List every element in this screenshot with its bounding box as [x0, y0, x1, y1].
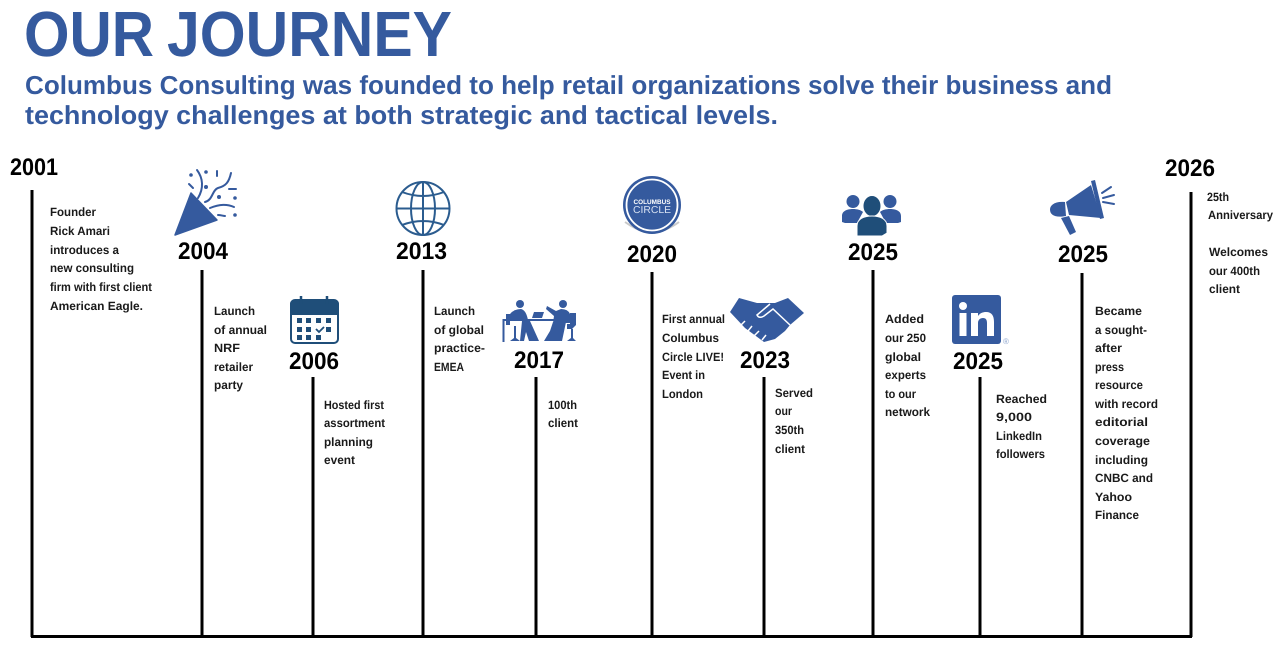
milestone 2025: press: Finance	[1095, 508, 1139, 522]
milestone 2025: experts: network	[885, 405, 930, 419]
milestone 2020: London	[662, 387, 703, 401]
milestone 2004: 2004	[178, 238, 229, 265]
milestone 2001: new consulting	[50, 261, 134, 275]
milestone 2013	[396, 238, 485, 374]
milestone 2026: 25th	[1207, 190, 1229, 204]
milestone 2013: of global	[434, 323, 484, 337]
milestone 2023: 2023	[740, 347, 790, 374]
milestone 2025: press: editorial	[1095, 415, 1148, 429]
milestone 2025: press: CNBC and	[1095, 471, 1153, 485]
milestone 2026: 2026	[1165, 155, 1215, 182]
milestone 2025: experts: global	[885, 350, 921, 364]
milestone 2025: press: press	[1095, 360, 1124, 374]
milestone 2025: press: a sought-	[1095, 323, 1147, 337]
subtitle: technology challenges at both strategic and tactical levels.	[25, 100, 778, 130]
milestone 2013: practice-	[434, 341, 485, 355]
milestone 2006: 2006	[289, 348, 339, 375]
milestone 2006: assortment	[324, 416, 385, 430]
milestone 2025: LinkedIn followers: Reached	[996, 392, 1047, 406]
icon: globe	[396, 182, 450, 235]
milestone 2017: 2017	[514, 347, 564, 374]
milestone 2025: experts: experts	[885, 368, 926, 382]
icon: handshake	[730, 298, 804, 342]
icon: meeting at desk	[502, 300, 576, 342]
milestone 2026: client	[1209, 282, 1240, 296]
milestone 2023: 350th	[775, 423, 804, 437]
milestone 2025: press	[1058, 241, 1158, 522]
milestone 2001: introduces a	[50, 243, 119, 257]
milestone 2023: Served	[775, 386, 813, 400]
milestone 2026	[1165, 155, 1273, 296]
title: OUR	[24, 0, 154, 70]
milestone 2025: press: coverage	[1095, 434, 1150, 448]
milestone 2004	[178, 238, 267, 392]
milestone 2020: First annual	[662, 312, 725, 326]
milestone 2020	[627, 241, 725, 401]
milestone 2026: Anniversary	[1208, 208, 1273, 222]
milestone 2025: press: including	[1095, 453, 1148, 467]
milestone 2025: experts: to our	[885, 387, 916, 401]
milestone 2001: firm with first client	[50, 280, 152, 294]
icon: megaphone	[1050, 180, 1114, 235]
milestone 2020: Columbus	[662, 331, 719, 345]
milestone 2004: retailer	[214, 360, 253, 374]
milestone 2017: client	[548, 416, 578, 430]
milestone 2025: experts	[848, 239, 930, 419]
icon: LinkedIn	[952, 295, 1009, 346]
milestone 2004: Launch	[214, 304, 255, 318]
milestone 2025: press: resource	[1095, 378, 1143, 392]
icon: Columbus Circle logo	[623, 176, 681, 234]
milestone 2006	[289, 348, 385, 467]
milestone 2025: LinkedIn followers: LinkedIn	[996, 429, 1042, 443]
milestone 2025: experts: our 250	[885, 331, 926, 345]
milestone 2025: LinkedIn followers: 9,000	[996, 410, 1032, 424]
icon: Columbus Circle logo: CIRCLE	[633, 205, 671, 216]
milestone 2013: 2013	[396, 238, 447, 265]
milestone 2017	[514, 347, 578, 430]
icon: Columbus Circle logo: COLUMBUS	[634, 199, 671, 206]
title: JOURNEY	[167, 0, 452, 70]
milestone 2006: Hosted first	[324, 398, 384, 412]
milestone 2004: party	[214, 378, 243, 392]
milestone 2026: Welcomes	[1209, 245, 1268, 259]
milestone 2025: press: Became	[1095, 304, 1142, 318]
icon: party popper	[175, 170, 237, 235]
milestone 2006: planning	[324, 435, 373, 449]
milestone 2020: 2020	[627, 241, 677, 268]
milestone 2025: experts: 2025	[848, 239, 898, 266]
milestone 2025: press: 2025	[1058, 241, 1108, 268]
milestone 2026: our 400th	[1209, 264, 1260, 278]
milestone 2023: our	[775, 404, 792, 418]
milestone 2025: experts: Added	[885, 312, 924, 326]
milestone 2001: 2001	[10, 154, 58, 181]
icon: group of people	[842, 195, 901, 236]
subtitle	[25, 70, 1112, 130]
icon: LinkedIn: ®	[1003, 337, 1009, 346]
milestone 2025: LinkedIn followers	[953, 348, 1047, 461]
milestone 2023	[740, 347, 813, 456]
milestone 2004: of annual	[214, 323, 267, 337]
milestone 2025: LinkedIn followers: 2025	[953, 348, 1003, 375]
milestone 2013: EMEA	[434, 360, 464, 374]
milestone 2020: Event in	[662, 368, 705, 382]
milestone 2025: press: after	[1095, 341, 1122, 355]
milestone 2025: press: with record	[1094, 397, 1158, 411]
milestone 2020: Circle LIVE!	[662, 350, 724, 364]
milestone 2004: NRF	[214, 341, 240, 355]
milestone 2006: event	[324, 453, 355, 467]
milestone 2001: American Eagle.	[50, 299, 143, 313]
milestone 2025: press: Yahoo	[1095, 490, 1132, 504]
milestone 2023: client	[775, 442, 805, 456]
icon: calendar	[290, 296, 339, 343]
timeline axis	[31, 190, 1192, 637]
milestone 2013: Launch	[434, 304, 475, 318]
milestone 2001	[10, 154, 152, 313]
subtitle: Columbus Consulting was founded to help retail organizations solve their business and	[25, 70, 1112, 100]
milestone 2017: 100th	[548, 398, 577, 412]
title	[24, 0, 452, 70]
milestone 2025: LinkedIn followers: followers	[996, 447, 1045, 461]
milestone 2001: Rick Amari	[50, 224, 110, 238]
milestone 2001: Founder	[50, 205, 96, 219]
